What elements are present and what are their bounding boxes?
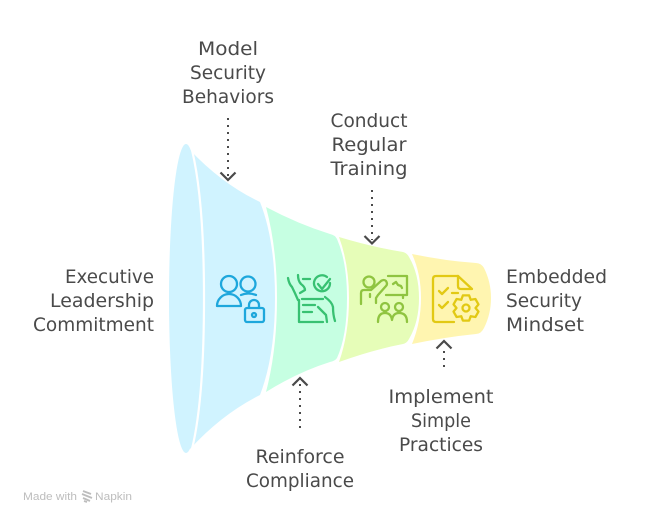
label: executive leadership commitment: Leadership [50,290,154,312]
label: executive leadership commitment: Commitment [33,314,154,336]
label: implement simple practices: Practices [399,434,483,456]
label: conduct regular training: Regular [332,134,407,156]
label: reinforce compliance: Reinforce [256,446,344,468]
label: embedded security mindset: Security [506,290,582,312]
icon: presenter with audience [361,276,407,322]
watermark: made with napkin: Napkin [95,491,132,503]
label: implement simple practices: Simple [411,410,471,432]
label: conduct regular training: Conduct [330,110,408,132]
label: implement simple practices [388,386,494,456]
arrow: reinforce compliance [292,378,308,428]
label: embedded security mindset: Embedded [506,266,607,288]
label: conduct regular training: Training [329,158,408,180]
watermark: made with napkin: Made with [23,491,77,503]
arrow: implement simple practices [436,341,452,367]
label: implement simple practices: Implement [388,386,494,408]
icon: compliance document [288,275,335,322]
label: conduct regular training [329,110,408,180]
funnel [169,144,491,453]
icon: checklist document with gear [433,276,478,322]
label: reinforce compliance [246,446,354,492]
segment 1: executive leadership commitment [169,144,275,453]
label: model security behaviors [182,38,274,108]
segment 3: conduct regular training [339,237,419,362]
label: model security behaviors: Security [190,62,266,84]
segment 2: reinforce compliance [266,207,347,392]
segment 4: embedded security mindset [412,254,491,344]
label: embedded security mindset [506,266,607,336]
label: reinforce compliance: Compliance [246,470,354,492]
label: model security behaviors: Model [198,38,258,60]
watermark: made with napkin [23,491,132,503]
label: executive leadership commitment [33,266,154,336]
label: model security behaviors: Behaviors [182,86,274,108]
arrow: model security behaviors [220,118,236,180]
label: embedded security mindset: Mindset [506,314,584,336]
label: executive leadership commitment: Executive [65,266,154,288]
arrow: conduct regular training [364,190,380,244]
icon: people with lock [217,276,264,322]
